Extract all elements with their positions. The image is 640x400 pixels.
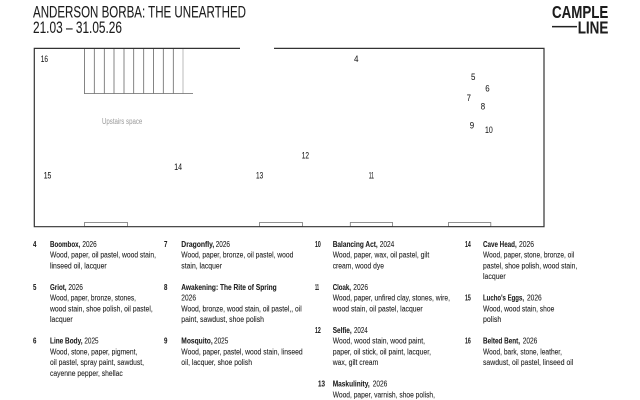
item 12: paper, oil stick, oil paint, lacquer, [333, 346, 431, 356]
item 8: Wood, bronze, wood stain, oil pastel,, oil [181, 303, 302, 313]
item 5: Griot, [50, 282, 66, 292]
item 13: Maskulinity, [333, 379, 370, 389]
item 12: Selfie, [333, 325, 352, 335]
item 7: Wood, paper, bronze, oil pastel, wood [181, 250, 293, 260]
item 5: wood stain, shoe polish, oil pastel, [49, 303, 153, 313]
item 6: Line Body, [50, 336, 82, 346]
item 7: 2026 [216, 239, 230, 249]
item 9: Mosquito, [181, 336, 213, 346]
stairs [84, 48, 193, 94]
item 12: 2024 [354, 325, 368, 335]
item 9 [164, 336, 303, 367]
item 4: Boombox, [50, 239, 80, 249]
item 15 [465, 292, 554, 324]
gallery walls [34, 48, 544, 227]
title: ANDERSON BORBA: THE UNEARTHED [33, 2, 246, 22]
list column 3 [315, 239, 450, 399]
logo: Cample Line [552, 2, 608, 38]
item 14: lacquer [483, 271, 506, 281]
item 11 [315, 282, 450, 313]
artwork position numbers: 12 [302, 150, 309, 160]
artwork position numbers: 6 [485, 84, 490, 94]
item 8: paint, sawdust, shoe polish [181, 314, 264, 324]
item 8 [164, 282, 302, 324]
item 11: Wood, paper, unfired clay, stones, wire, [333, 292, 450, 302]
item 6 [33, 336, 144, 378]
item 9: oil, lacquer, shoe polish [181, 357, 252, 367]
item 9: 2025 [214, 336, 228, 346]
item 15: Wood, wood stain, shoe [483, 303, 554, 313]
item 12: wax, gilt cream [332, 357, 378, 367]
item 7: 7 [164, 239, 168, 249]
item 4: Wood, paper, oil pastel, wood stain, [50, 250, 156, 260]
item 6: cayenne pepper, shellac [50, 368, 123, 378]
item 13 [318, 379, 435, 399]
floor plan [34, 48, 544, 227]
item 7: stain, lacquer [181, 260, 222, 270]
item 8: Awakening: The Rite of Spring [181, 282, 277, 292]
item 5: lacquer [50, 314, 73, 324]
item 15: 15 [465, 292, 471, 302]
item 16: Belted Bent, [483, 336, 520, 346]
artwork position numbers: 10 [485, 125, 493, 135]
item 14: pastel, shoe polish, wood stain, [483, 260, 577, 270]
item 7 [164, 239, 293, 270]
item 16: Wood, bark, stone, leather, [483, 346, 562, 356]
artwork position numbers: 9 [470, 121, 474, 131]
item 10: Wood, paper, wax, oil pastel, gilt [333, 250, 430, 260]
item 4 [33, 239, 156, 270]
item 4: 2026 [82, 239, 97, 249]
item 15: Lucho's Eggs, [483, 292, 524, 302]
item 16: sawdust, oil pastel, linseed oil [483, 357, 573, 367]
logo: Cample Line: CAMPLE [552, 2, 608, 22]
item 9: Wood, paper, pastel, wood stain, linseed [181, 346, 303, 356]
item 16: 16 [465, 336, 471, 346]
item 12: Wood, wood stain, wood paint, [333, 336, 425, 346]
item 14: Cave Head, [483, 239, 517, 249]
artwork position numbers: 14 [174, 162, 182, 172]
artwork position numbers: 15 [44, 171, 51, 181]
item 5 [33, 282, 153, 324]
item 15: polish [483, 314, 501, 324]
artwork position numbers: 8 [481, 101, 485, 111]
item 14: 14 [465, 239, 471, 249]
item 7: Dragonfly, [181, 239, 214, 249]
item 8: 8 [164, 282, 168, 292]
item 5: Wood, paper, bronze, stones, [50, 292, 136, 302]
item 14: Wood, paper, stone, bronze, oil [483, 250, 574, 260]
item 16 [465, 336, 573, 367]
item 9: 9 [164, 336, 168, 346]
item 6: 6 [33, 336, 37, 346]
item 12 [315, 325, 431, 367]
artwork position numbers: 7 [467, 93, 471, 103]
upstairs space label: Upstairs space [102, 117, 143, 126]
artwork position numbers [41, 54, 493, 181]
item 6: oil pastel, spray paint, sawdust, [50, 357, 144, 367]
windows [84, 222, 491, 226]
item 11: 11 [315, 282, 319, 292]
item 11: 2026 [353, 282, 368, 292]
item 6: 2025 [84, 336, 99, 346]
item 16: 2026 [523, 336, 537, 346]
item 5: 5 [33, 282, 37, 292]
item 10: Balancing Act, [333, 239, 378, 249]
item 8: 2026 [181, 292, 196, 302]
item 6: Wood, stone, paper, pigment, [50, 346, 137, 356]
item 10 [315, 239, 430, 270]
item 4: 4 [33, 239, 37, 249]
item 13: 2026 [373, 379, 387, 389]
list column 4 [465, 239, 577, 367]
artwork position numbers: 13 [256, 171, 263, 181]
title: 21.03 – 31.05.26 [33, 18, 122, 37]
item 12: 12 [315, 325, 321, 335]
item 13: 13 [318, 379, 325, 389]
item 10: 10 [315, 239, 321, 249]
item 5: 2026 [68, 282, 83, 292]
item 11: wood stain, oil pastel, lacquer [332, 303, 423, 313]
artwork position numbers: 16 [41, 54, 48, 64]
artwork position numbers: 11 [369, 171, 374, 181]
item 4: linseed oil, lacquer [50, 260, 107, 270]
artwork position numbers: 5 [471, 72, 475, 82]
item 10: 2024 [380, 239, 394, 249]
item 14: 2026 [519, 239, 534, 249]
list column 2 [164, 239, 303, 367]
title [33, 2, 246, 37]
item 10: cream, wood dye [333, 260, 384, 270]
list column 1 [33, 239, 156, 378]
item 13: Wood, paper, varnish, shoe polish, [333, 389, 435, 399]
item 11: Cloak, [333, 282, 351, 292]
logo: Cample Line: LINE [578, 18, 608, 38]
item 14 [465, 239, 577, 281]
artwork position numbers: 4 [354, 54, 358, 64]
item 15: 2026 [527, 292, 542, 302]
